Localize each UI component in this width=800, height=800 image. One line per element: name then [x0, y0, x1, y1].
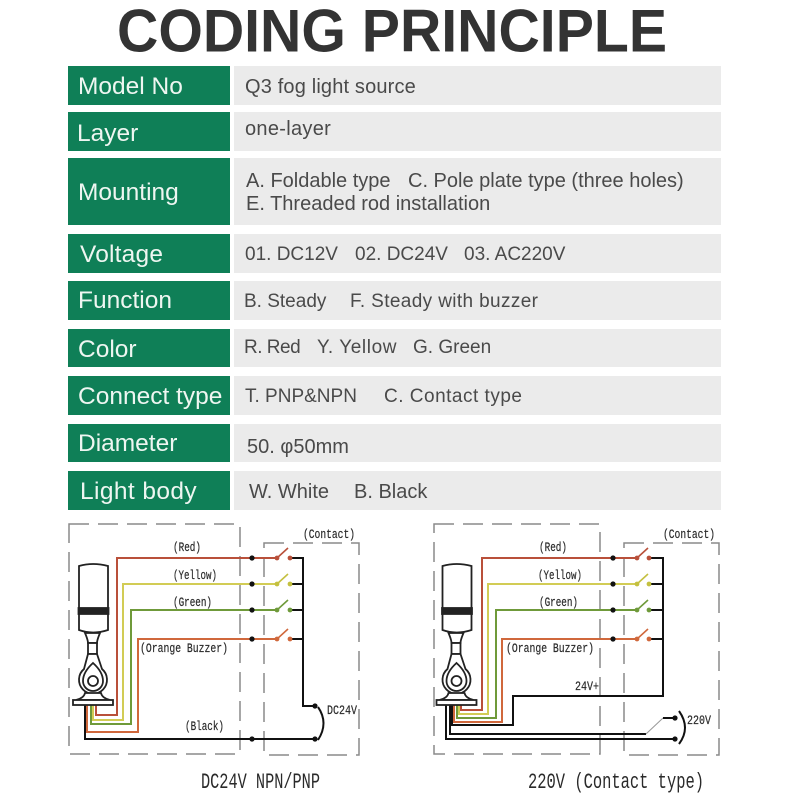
label: connect type: Connect type — [78, 383, 222, 410]
value: voltage: 01. DC12V — [245, 244, 338, 265]
junction dots — [249, 555, 318, 742]
220V supply arc — [679, 711, 685, 744]
icon: signal tower light — [73, 564, 113, 705]
row: color — [68, 329, 721, 367]
label: color — [68, 329, 230, 367]
orange wire — [87, 639, 277, 732]
diagram: 220V contact type — [434, 524, 719, 795]
row: model no — [68, 66, 721, 105]
label: voltage: Voltage — [80, 241, 163, 268]
wire labels: (Orange Buzzer) — [140, 641, 228, 656]
value: layer: one-layer — [245, 118, 331, 140]
icon: signal tower light — [436, 564, 476, 705]
wire labels: (Red) — [539, 540, 567, 555]
value: function — [234, 281, 721, 320]
black wires — [450, 705, 646, 734]
wire labels: (Orange Buzzer) — [506, 641, 594, 656]
value: voltage: 03. AC220V — [464, 244, 565, 265]
wire labels: (Green) — [539, 595, 578, 610]
label: layer: Layer — [77, 120, 138, 147]
value: connect type: C. Contact type — [384, 386, 522, 407]
wire labels: (Green) — [173, 595, 212, 610]
label: light body: Light body — [80, 478, 197, 505]
value: mounting — [234, 158, 721, 225]
wire labels — [140, 527, 357, 734]
switches — [275, 548, 292, 641]
value: color — [234, 329, 721, 367]
contact link — [646, 718, 663, 734]
value: voltage — [234, 234, 721, 273]
red wire — [96, 558, 277, 715]
label: model no: Model No — [78, 73, 183, 100]
value: light body: B. Black — [354, 481, 427, 503]
label: color: Color — [78, 336, 137, 363]
diagram: DC24V NPN/PNP — [69, 524, 359, 795]
label: function: Function — [78, 287, 172, 314]
label: diameter — [68, 424, 230, 462]
black wire — [85, 705, 315, 739]
wire labels: (Yellow) — [173, 568, 217, 583]
caption: DC24V NPN/PNP — [201, 770, 320, 795]
value: color: Y. Yellow — [317, 337, 397, 358]
caption: 220V (Contact type) — [528, 770, 704, 795]
label: model no — [68, 66, 230, 105]
value: mounting: E. Threaded rod installation — [246, 193, 490, 215]
wire labels: DC24V — [327, 703, 357, 718]
value: light body: W. White — [249, 481, 329, 503]
lamp box outline — [69, 524, 240, 754]
label: function — [68, 281, 230, 320]
yellow wire — [459, 584, 637, 714]
value: model no — [234, 66, 721, 105]
label: connect type — [68, 376, 230, 415]
wire labels: 220V — [687, 713, 711, 728]
red wire — [461, 558, 637, 710]
value: model no: Q3 fog light source — [245, 76, 416, 98]
wire labels: (Red) — [173, 540, 201, 555]
junction dots — [610, 555, 678, 742]
value: voltage: 02. DC24V — [355, 244, 448, 265]
row: mounting — [68, 158, 721, 225]
wiring diagrams — [68, 523, 720, 795]
orange wire — [454, 639, 637, 722]
green wire — [457, 610, 637, 718]
value: connect type: T. PNP&NPN — [245, 386, 357, 407]
wire labels: 24V+ — [575, 679, 599, 694]
DC24V supply arc — [318, 707, 324, 740]
yellow wire — [93, 584, 277, 720]
green wire — [91, 610, 277, 724]
lamp box outline — [434, 524, 600, 754]
value: color: G. Green — [413, 337, 491, 358]
label: mounting: Mounting — [78, 179, 179, 206]
label: voltage — [68, 234, 230, 273]
value: function: B. Steady — [244, 291, 326, 312]
common line — [290, 558, 315, 706]
value: mounting: A. Foldable type — [246, 170, 391, 192]
wire labels: (Yellow) — [538, 568, 582, 583]
contact box outline — [624, 543, 719, 755]
value: color: R. Red — [244, 337, 300, 358]
label: diameter: Diameter — [78, 430, 177, 457]
row: layer — [68, 112, 721, 151]
value: diameter: 50. φ50mm — [247, 436, 349, 458]
wire labels: (Contact) — [663, 527, 715, 542]
24V+ line — [452, 558, 663, 725]
label: layer — [68, 112, 230, 151]
value: function: F. Steady with buzzer — [350, 291, 538, 312]
value: connect type — [234, 376, 721, 415]
wire labels — [506, 527, 715, 728]
row: function — [68, 281, 721, 320]
row: diameter — [68, 424, 721, 462]
wire labels: (Contact) — [303, 527, 355, 542]
value: light body — [234, 471, 721, 510]
label: mounting — [68, 158, 230, 225]
value: diameter — [234, 424, 721, 462]
row: voltage — [68, 234, 721, 273]
label: light body — [68, 471, 230, 510]
value: mounting: C. Pole plate type (three holes) — [408, 170, 684, 192]
value: layer — [234, 112, 721, 151]
switches — [635, 548, 651, 641]
row: light body — [68, 471, 721, 510]
wire labels: (Black) — [185, 719, 224, 734]
contact box outline — [264, 543, 359, 755]
row: connect type — [68, 376, 721, 415]
